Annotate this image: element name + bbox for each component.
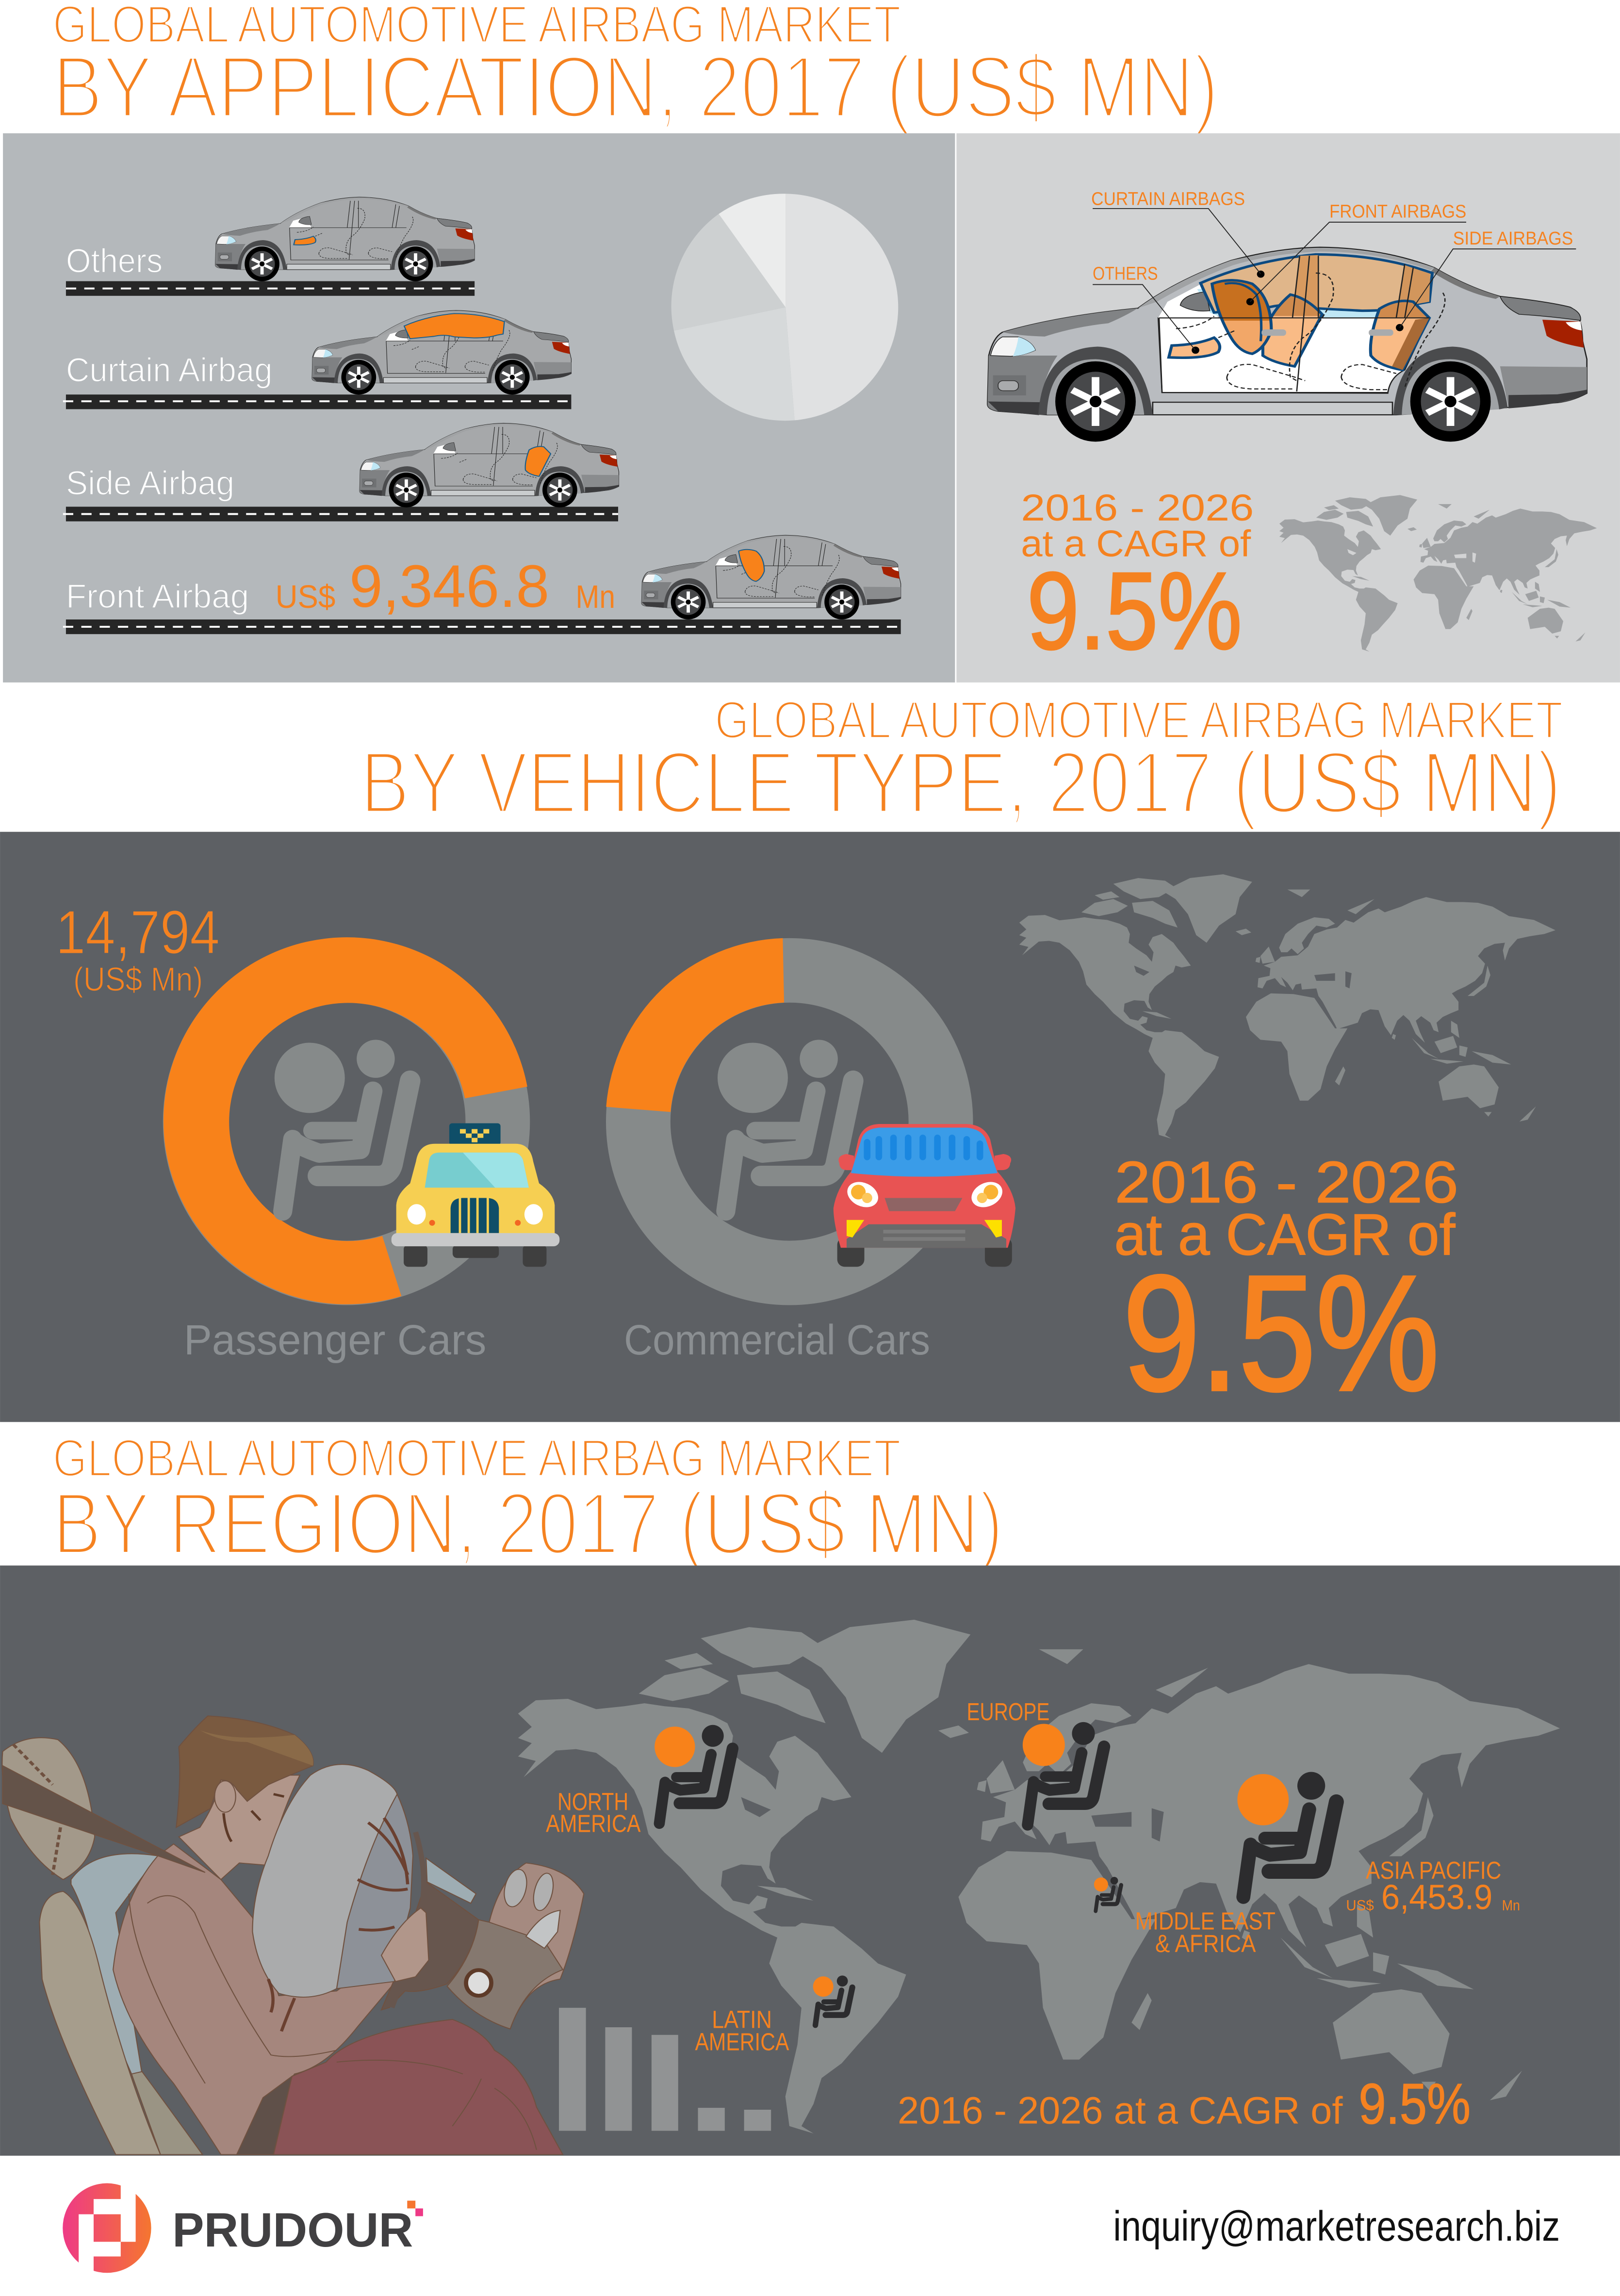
car: curtain airbag	[312, 310, 571, 394]
icon: red car	[834, 1124, 1015, 1267]
stat: cagr: 9.5%	[1027, 549, 1242, 672]
callout: side airbags: SIDE AIRBAGS	[1453, 228, 1573, 248]
callout: others	[1093, 263, 1195, 350]
stat: cagr	[1114, 1150, 1458, 1425]
label: middle east and africa	[1135, 1907, 1276, 1957]
label: others: Others	[66, 242, 163, 280]
label: asia pacific with value	[1346, 1856, 1520, 1917]
icon: seated passenger, passenger cars	[275, 1040, 410, 1211]
value: passenger cars market size	[56, 897, 220, 998]
label: asia pacific with value: 6,453.9	[1381, 1878, 1492, 1917]
marker: middle east and africa	[1094, 1877, 1121, 1911]
road: front airbag	[63, 619, 905, 634]
label: middle east and africa: MIDDLE EAST	[1135, 1907, 1276, 1935]
marker: asia pacific	[1237, 1772, 1336, 1897]
value: front airbag market size: US$	[276, 579, 335, 615]
marker: latin america	[813, 1975, 852, 2025]
car: side airbag	[360, 423, 619, 507]
stat: cagr: at a CAGR of	[1114, 1202, 1456, 1268]
label: asia pacific with value: ASIA PACIFIC	[1366, 1856, 1501, 1884]
bar chart: region ranking	[559, 2008, 771, 2131]
logo mark	[63, 2182, 151, 2274]
label: front airbag: Front Airbag	[66, 577, 249, 615]
car: others	[215, 197, 475, 281]
illustration: driver and airbag	[2, 1716, 584, 2154]
value: front airbag market size: 9,346.8	[349, 553, 549, 620]
heading: by region	[53, 1429, 1003, 1573]
callout: curtain airbags	[1091, 189, 1260, 274]
panel: vehicle type	[0, 832, 1620, 1425]
stat: cagr: 2016 - 2026	[1021, 487, 1254, 529]
pie chart: application share	[671, 194, 898, 421]
callout: others: OTHERS	[1093, 263, 1158, 284]
donut: passenger cars	[164, 937, 527, 1304]
donut: commercial cars	[606, 938, 941, 1273]
stat: cagr: 9.5%	[1358, 2071, 1471, 2135]
label: latin america: AMERICA	[695, 2028, 789, 2055]
label: passenger cars: Passenger Cars	[184, 1316, 486, 1364]
stat: cagr: 2016 - 2026 at a CAGR of	[898, 2089, 1343, 2132]
label: north america	[546, 1788, 641, 1838]
callout: front airbags	[1250, 201, 1466, 302]
label: north america: AMERICA	[546, 1810, 641, 1838]
panel: application breakdown	[3, 133, 955, 683]
heading: by region: BY REGION, 2017 (US$ MN)	[53, 1475, 1003, 1573]
value: front airbag market size: Mn	[575, 579, 615, 615]
callout: curtain airbags: CURTAIN AIRBAGS	[1091, 189, 1245, 209]
label: side airbag: Side Airbag	[66, 464, 234, 502]
road: others	[66, 281, 475, 296]
stat: cagr: 9.5%	[1123, 1241, 1439, 1425]
value: front airbag market size	[276, 553, 615, 620]
icon: seated passenger, commercial cars	[718, 1040, 853, 1211]
label: europe: EUROPE	[967, 1698, 1049, 1726]
marker: north america	[655, 1725, 733, 1824]
value: passenger cars market size: (US$ Mn)	[73, 961, 203, 998]
label: curtain airbag: Curtain Airbag	[66, 351, 273, 389]
road: side airbag	[63, 507, 618, 521]
stat: cagr: at a CAGR of	[1021, 523, 1251, 565]
label: middle east and africa: & AFRICA	[1155, 1930, 1256, 1957]
map: world, application panel	[1279, 495, 1597, 651]
panel: region	[0, 1565, 1620, 2156]
road: curtain airbag	[63, 394, 571, 409]
label: north america: NORTH	[557, 1788, 628, 1815]
logo wordmark: PRUDOUR	[172, 2203, 413, 2257]
car: front airbag	[641, 535, 901, 619]
label: latin america	[695, 2006, 789, 2055]
label: asia pacific with value: US$	[1346, 1898, 1374, 1914]
stat: cagr: 2016 - 2026	[1114, 1150, 1458, 1215]
value: passenger cars market size: 14,794	[56, 897, 220, 966]
heading: by region: GLOBAL AUTOMOTIVE AIRBAG MARKET	[53, 1429, 901, 1488]
logo accent squares	[407, 2200, 423, 2216]
heading: by application: BY APPLICATION, 2017 (US$ MN)	[53, 38, 1219, 136]
panel: airbag locations and growth	[956, 133, 1620, 683]
label: asia pacific with value: Mn	[1502, 1898, 1520, 1914]
map: world, vehicle panel	[1019, 874, 1555, 1139]
callout: front airbags: FRONT AIRBAGS	[1329, 201, 1466, 221]
heading: by application	[53, 0, 1219, 136]
diagram: car cutaway with airbags	[987, 247, 1587, 441]
callout: side airbags	[1400, 228, 1576, 327]
label: latin america: LATIN	[712, 2006, 772, 2034]
map: world, region panel	[518, 1620, 1560, 2133]
label: commercial cars: Commercial Cars	[624, 1316, 930, 1364]
stat: cagr	[1021, 487, 1254, 672]
logo: prudour	[63, 2182, 423, 2274]
icon: taxi	[392, 1123, 559, 1267]
marker: europe	[1023, 1722, 1104, 1825]
stat: cagr	[898, 2071, 1471, 2135]
heading: by vehicle type	[360, 691, 1563, 831]
